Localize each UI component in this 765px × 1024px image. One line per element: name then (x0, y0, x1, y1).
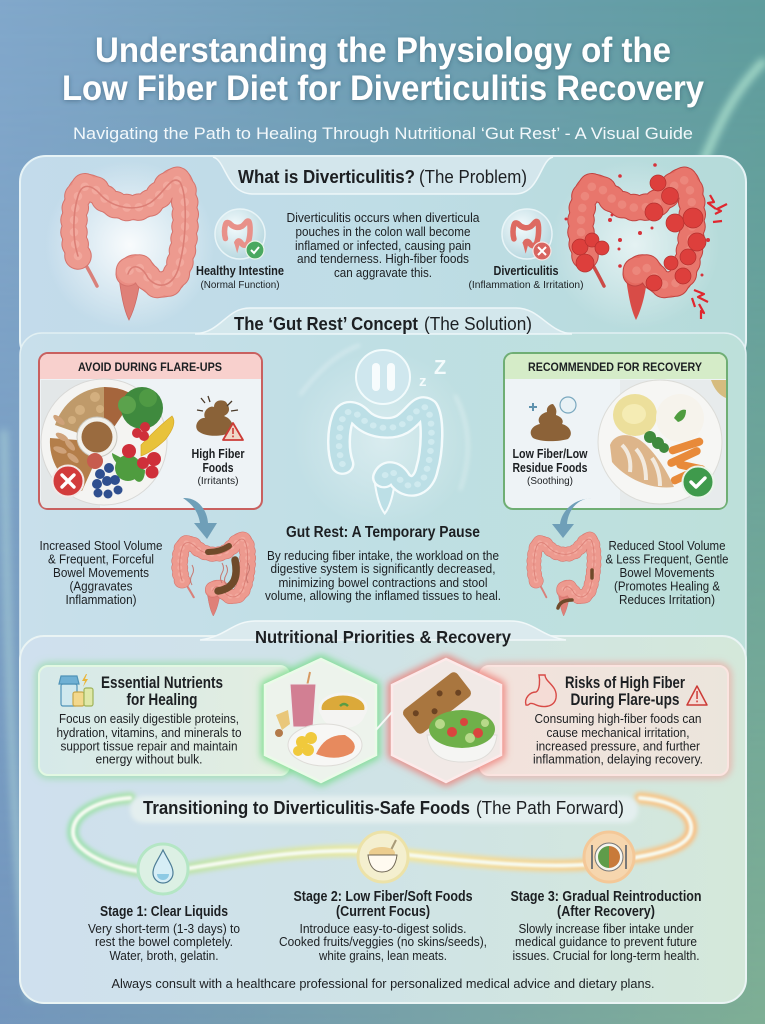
heading: Risks of High Fiber (565, 674, 685, 692)
icon: red x (52, 466, 84, 496)
heading tab (200, 621, 566, 647)
gut rest heading: Gut Rest: A Temporary Pause (286, 524, 480, 541)
stage 3 text (510, 889, 702, 963)
icon: stomach (526, 675, 556, 706)
card: avoid during flare-ups (39, 353, 262, 509)
arrow: recommended to colon (552, 498, 592, 538)
icon: irritated stool (196, 396, 243, 440)
stage 1 text (88, 904, 240, 963)
definition text: Diverticulitis occurs when diverticula (286, 211, 480, 225)
card: recommended for recovery: RECOMMENDED FOR RECOVERY (528, 360, 702, 374)
soup bowl (320, 694, 366, 728)
title: Understanding the Physiology of the (95, 31, 671, 70)
panel: gut rest concept (20, 308, 746, 683)
body: inflammation, delaying recovery. (533, 752, 703, 766)
card: recommended for recovery (504, 353, 727, 509)
icon: stage 1 water drop (138, 844, 188, 894)
gut rest illustration (293, 345, 473, 530)
heading tab (213, 157, 553, 194)
healthy intestine medallion (215, 209, 265, 259)
icon: warning (687, 686, 707, 705)
stage 1 text: Stage 1: Clear Liquids (100, 904, 228, 920)
card: essential nutrients (39, 666, 289, 775)
consequence text: high fiber: (Aggravates (70, 580, 132, 594)
definition text (286, 211, 480, 280)
icon: sleep z: Z (434, 357, 446, 379)
stage 2 text (279, 889, 487, 963)
heading tab: (The Solution) (424, 314, 532, 334)
label: low fiber foods: (Soothing) (527, 475, 573, 487)
heading tab (195, 308, 572, 334)
heading: transition (130, 796, 638, 823)
consequence text: low fiber (606, 539, 729, 607)
label: healthy intestine (196, 264, 284, 291)
title: Low Fiber Diet for Diverticulitis Recovery (62, 69, 704, 108)
hexagon: healing foods (265, 659, 376, 782)
icon: pause button (356, 350, 410, 404)
consequence text: low fiber: & Less Frequent, Gentle (606, 552, 729, 566)
heading: During Flare-ups (570, 691, 680, 709)
icon: colon with bulky stool (180, 539, 250, 616)
label: low fiber foods (512, 446, 588, 487)
smoothie (290, 672, 316, 727)
salad bowl (427, 710, 497, 762)
stage 2 text: Stage 2: Low Fiber/Soft Foods (294, 889, 472, 905)
panel: what is diverticulitis (20, 156, 746, 366)
heading: for Healing (126, 691, 198, 709)
card: risks of high fiber (480, 666, 728, 775)
stage 2 text: (Current Focus) (336, 904, 430, 920)
consequence text: low fiber: Reduced Stool Volume (608, 539, 726, 553)
label: healthy intestine: Healthy Intestine (196, 264, 284, 278)
label: high fiber foods: Foods (202, 460, 234, 475)
consequence text: high fiber (40, 539, 163, 607)
body: support tissue repair and maintain (60, 740, 238, 754)
icon: green check (682, 466, 714, 498)
title (62, 31, 704, 108)
gut rest description: digestive system is significantly decreased, (270, 562, 496, 576)
low fiber plate (598, 380, 726, 508)
footer note: Always consult with a healthcare professional for personalized medical advice and dietary plans. (112, 976, 654, 991)
body: energy without bulk. (96, 752, 202, 766)
icon: soothing stool (529, 397, 576, 441)
banana (275, 710, 290, 737)
gut rest description: volume, allowing the inflamed tissues to heal. (265, 589, 501, 603)
panel: nutritional priorities and path (20, 621, 746, 1003)
heading tab: (The Problem) (419, 166, 527, 187)
body (533, 712, 703, 766)
stage 3 text: Stage 3: Gradual Reintroduction (510, 889, 702, 905)
heading (565, 674, 685, 709)
label: healthy intestine: (Normal Function) (200, 279, 280, 291)
stage 2 text: Cooked fruits/veggies (no skins/seeds), (279, 935, 487, 949)
label: high fiber foods: High Fiber (192, 446, 244, 461)
icon: stage 2 porridge bowl (358, 832, 408, 882)
stage 2 text: white grains, lean meats. (318, 949, 447, 963)
label: diverticulitis: (Inflammation & Irritation) (468, 279, 584, 291)
heading: transition: Transitioning to Diverticulitis-Safe Foods (143, 798, 470, 818)
consequence text: low fiber: (Promotes Healing & (614, 580, 721, 594)
gut rest description: minimizing bowel contractions and stool (278, 576, 488, 590)
gut rest description (265, 549, 501, 603)
definition text: pouches in the colon wall become (296, 225, 471, 239)
body: hydration, vitamins, and minerals to (56, 726, 242, 740)
body: increased pressure, and further (536, 740, 700, 754)
icon: sleep z: z (419, 373, 426, 390)
label: low fiber foods: Residue Foods (512, 460, 588, 475)
body: Focus on easily digestible proteins, (59, 712, 239, 726)
body: Consuming high-fiber foods can (534, 712, 702, 726)
gut rest description: By reducing fiber intake, the workload on the (267, 549, 499, 563)
definition text: inflamed or infected, causing pain (295, 239, 471, 253)
label: diverticulitis: Diverticulitis (494, 264, 559, 278)
heading: transition: (The Path Forward) (476, 798, 624, 818)
icon: supplements (59, 674, 93, 706)
consequence text: high fiber: Increased Stool Volume (40, 539, 163, 553)
subtitle: Navigating the Path to Healing Through Nutritional ‘Gut Rest’ - A Visual Guide (73, 124, 693, 143)
stage 1 text: Water, broth, gelatin. (110, 949, 218, 963)
diverticulitis medallion (502, 209, 552, 260)
consequence text: low fiber: Bowel Movements (620, 566, 714, 580)
path: stages ribbon (73, 798, 691, 872)
hexagon: high fiber foods (392, 659, 501, 782)
high fiber plate (41, 379, 174, 508)
icon: sleep z (419, 357, 446, 390)
label: high fiber foods: (Irritants) (198, 475, 238, 487)
stage 3 text: (After Recovery) (557, 904, 655, 920)
definition text: can aggravate this. (334, 266, 432, 280)
icon: stage 3 plate (584, 832, 634, 882)
stage 2 text: Introduce easy-to-digest solids. (300, 922, 466, 936)
heading tab: Nutritional Priorities & Recovery (255, 627, 511, 647)
stage 1 text: Very short-term (1-3 days) to (88, 922, 240, 936)
connector between hexagons (376, 712, 392, 730)
stage 3 text: Slowly increase fiber intake under (518, 922, 694, 936)
stage 3 text: issues. Crucial for long-term health. (512, 949, 700, 963)
consequence text: high fiber: Inflammation) (66, 593, 136, 607)
stage 3 text: medical guidance to prevent future (515, 935, 697, 949)
heading tab: The ‘Gut Rest’ Concept (234, 314, 418, 334)
stage 1 text: rest the bowel completely. (95, 935, 233, 949)
body: cause mechanical irritation, (546, 726, 690, 740)
card: avoid during flare-ups: AVOID DURING FLARE-UPS (78, 360, 222, 374)
arrow: avoid to colon (183, 498, 217, 539)
heading tab: What is Diverticulitis? (238, 166, 415, 187)
label: low fiber foods: Low Fiber/Low (512, 446, 588, 461)
body (56, 712, 242, 766)
consequence text: low fiber: Reduces Irritation) (619, 593, 715, 607)
granola bar (401, 670, 473, 736)
definition text: and tenderness. High-fiber foods (297, 252, 469, 266)
icon: healthy colon (74, 180, 185, 320)
label: diverticulitis (468, 264, 584, 291)
heading: Essential Nutrients (101, 674, 223, 692)
icon: translucent colon (339, 407, 431, 514)
label: high fiber foods (192, 446, 244, 487)
icon: inflamed colon (564, 163, 727, 320)
consequence text: high fiber: Bowel Movements (53, 566, 149, 580)
heading (101, 674, 223, 709)
salmon plate (288, 724, 362, 766)
consequence text: high fiber: & Frequent, Forceful (48, 552, 154, 566)
icon: colon with reduced stool (534, 539, 594, 616)
